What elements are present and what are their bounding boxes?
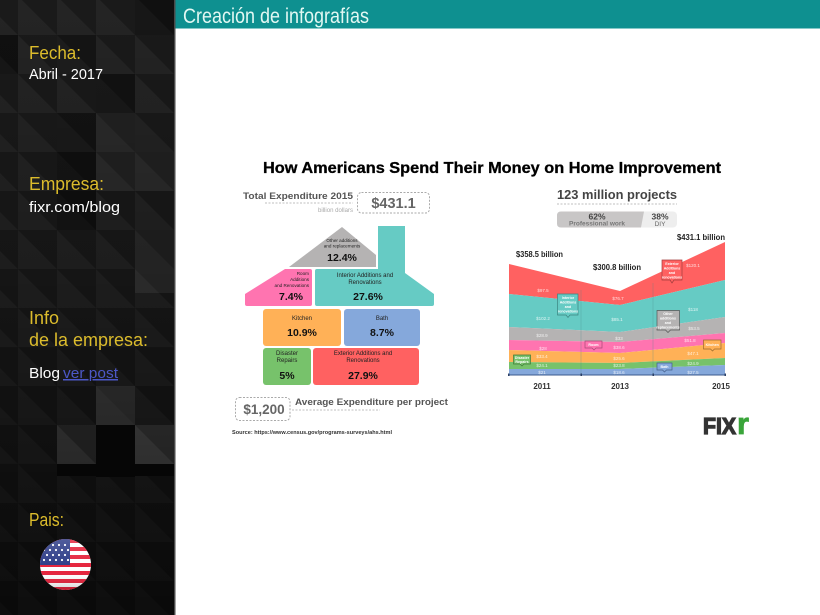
room additions: Additions bbox=[290, 277, 310, 282]
chart: stacked area of spending 2011-2015 bbox=[508, 242, 726, 376]
value labels: $18.6 bbox=[613, 370, 625, 375]
value labels: $53.5 bbox=[688, 326, 700, 331]
value labels: $24.9 bbox=[687, 361, 699, 366]
interior additions with chimney: Interior Additions and bbox=[337, 273, 393, 279]
text block: Info de la empresa: de la empresa: bbox=[29, 330, 148, 350]
callout: other additions: additions bbox=[660, 316, 676, 320]
logo: Fixr: r bbox=[737, 406, 749, 441]
interior additions with chimney: Renovations bbox=[348, 280, 382, 286]
exterior additions: 27.9% bbox=[348, 370, 379, 382]
panel: total expenditure: Total Expenditure 2015 bbox=[243, 191, 353, 201]
chart axis years bbox=[533, 382, 730, 391]
value labels: $76.7 bbox=[612, 296, 624, 301]
text block: Fecha bbox=[29, 43, 103, 83]
heading: Creación de infografías: Creación de infografías bbox=[183, 5, 369, 28]
room additions: 7.4% bbox=[279, 291, 304, 303]
panel: average expenditure: Average Expenditure per project bbox=[295, 397, 449, 408]
panel: dark sidebar bbox=[0, 0, 176, 615]
text block: Fecha: Fecha: bbox=[29, 43, 81, 63]
interior additions with chimney: 27.6% bbox=[353, 291, 384, 303]
bath: 8.7% bbox=[370, 327, 395, 339]
callout: exterior additions bbox=[662, 260, 682, 283]
bar: professional work vs DIY: DIY bbox=[655, 221, 666, 228]
text block: Empresa: fixr.com/blog bbox=[29, 199, 120, 216]
value labels: $118 bbox=[688, 307, 698, 312]
disaster repairs: Disaster bbox=[276, 351, 298, 357]
value labels: $97.5 bbox=[537, 288, 549, 293]
title: How Americans Spend Their Money on Home Improvement bbox=[263, 160, 722, 177]
bar: professional work vs DIY: Professional work bbox=[569, 220, 625, 228]
chart totals bbox=[516, 233, 725, 272]
chart axis years: 2011 bbox=[533, 382, 551, 391]
value labels: $102.2 bbox=[536, 316, 550, 321]
bath: Bath bbox=[376, 316, 388, 322]
roof: other additions: 12.4% bbox=[327, 252, 358, 264]
callout: exterior additions: Additions bbox=[664, 266, 680, 270]
exterior additions: Exterior Additions and bbox=[334, 351, 392, 357]
chart totals: $358.5 billion bbox=[516, 250, 563, 259]
room additions: and Renovations bbox=[275, 283, 310, 288]
callout: interior additions 2011: renovations bbox=[558, 310, 578, 314]
value labels: $27.5 bbox=[687, 370, 699, 375]
callout: other additions: replacements bbox=[656, 326, 680, 330]
callout: interior additions 2011: Interior bbox=[562, 296, 575, 300]
panel: average expenditure bbox=[236, 397, 449, 420]
roof: other additions: and replacements bbox=[324, 244, 361, 248]
callout: interior additions 2011: Additions bbox=[560, 300, 576, 304]
exterior additions: Renovations bbox=[346, 358, 380, 364]
text block: Empresa bbox=[29, 174, 120, 216]
disaster repairs: Repairs bbox=[277, 358, 297, 364]
callout: room: Room bbox=[588, 343, 599, 347]
callout: exterior additions: Exterior bbox=[665, 262, 679, 266]
text block: Info de la empresa: ver post bbox=[63, 365, 119, 382]
callout: other additions bbox=[656, 310, 680, 332]
chart totals: $300.8 billion bbox=[593, 263, 641, 272]
callout: disaster repairs bbox=[514, 355, 530, 366]
text block: Pais: Pais: bbox=[29, 510, 64, 530]
value labels: $23.8 bbox=[613, 363, 625, 368]
room additions: Room bbox=[297, 271, 309, 276]
logo: Fixr: FIX bbox=[703, 413, 737, 439]
room additions bbox=[245, 269, 312, 306]
value labels: $24.1 bbox=[536, 363, 548, 368]
panel: total expenditure bbox=[243, 191, 430, 214]
callout: interior additions 2011 bbox=[558, 294, 578, 318]
bar: professional work vs DIY: 38% bbox=[651, 212, 669, 222]
chart totals: $431.1 billion bbox=[677, 233, 725, 242]
kitchen: 10.9% bbox=[287, 327, 318, 339]
value labels: $28.9 bbox=[536, 333, 548, 338]
callout: kitchen: Kitchen bbox=[706, 343, 719, 347]
value labels: $33.4 bbox=[536, 354, 548, 359]
icon: USA flag bbox=[40, 539, 91, 591]
callout: room bbox=[585, 341, 602, 350]
text block: source: Source: https://www.census.gov/programs-surveys/ahs.html bbox=[232, 430, 392, 436]
value labels: $85.1 bbox=[611, 317, 623, 322]
bar: professional work vs DIY: 62% bbox=[588, 212, 606, 222]
bar: professional work vs DIY bbox=[557, 212, 677, 228]
callout: interior additions 2011: and bbox=[565, 305, 571, 309]
value labels: $51.8 bbox=[684, 338, 696, 343]
text block: Fecha: Abril - 2017 bbox=[29, 66, 103, 83]
callout: other additions: and bbox=[665, 321, 671, 325]
kitchen bbox=[263, 309, 341, 346]
callout: disaster repairs: Repairs bbox=[515, 360, 529, 364]
text block: Empresa: Empresa: bbox=[29, 174, 104, 194]
text block: Info de la empresa bbox=[29, 308, 148, 382]
disaster repairs bbox=[263, 348, 311, 385]
panel: total expenditure: $431.1 bbox=[371, 196, 416, 212]
panel: total expenditure: billion dollars bbox=[318, 208, 353, 214]
kitchen: Kitchen bbox=[292, 316, 312, 322]
panel: average expenditure: $1,200 bbox=[243, 402, 285, 417]
text block: Info de la empresa: Info bbox=[29, 308, 59, 328]
value labels: $21 bbox=[538, 370, 546, 375]
disaster repairs: 5% bbox=[279, 370, 295, 382]
callout: other additions: Other bbox=[663, 312, 673, 316]
value labels: $25.6 bbox=[613, 356, 625, 361]
value labels bbox=[536, 263, 700, 375]
callout: exterior additions: renovations bbox=[662, 276, 682, 280]
chart axis years: 2013 bbox=[611, 382, 629, 391]
value labels: $33 bbox=[615, 336, 623, 341]
exterior additions bbox=[313, 348, 419, 385]
callout: bath: Bath bbox=[660, 365, 668, 369]
chart axis years: 2015 bbox=[712, 382, 730, 391]
value labels: $120.1 bbox=[686, 263, 700, 268]
value labels: $47.1 bbox=[687, 351, 699, 356]
logo: Fixr bbox=[703, 406, 749, 441]
callout: disaster repairs: Disaster bbox=[515, 356, 530, 360]
bath bbox=[344, 309, 420, 346]
callout: bath bbox=[657, 363, 672, 372]
roof: other additions: Other additions bbox=[326, 238, 358, 243]
text block: Info de la empresa: Blog bbox=[29, 365, 60, 382]
value labels: $38.6 bbox=[613, 345, 625, 350]
callout: kitchen bbox=[704, 340, 721, 351]
callout: exterior additions: and bbox=[669, 271, 675, 275]
value labels: $28 bbox=[539, 346, 547, 351]
interior additions with chimney bbox=[315, 226, 434, 306]
chart: house of expenditure shares bbox=[245, 226, 434, 385]
heading: 123 million projects: 123 million projects bbox=[557, 187, 677, 202]
roof: other additions bbox=[289, 227, 376, 267]
panel: teal header bar bbox=[176, 0, 820, 28]
